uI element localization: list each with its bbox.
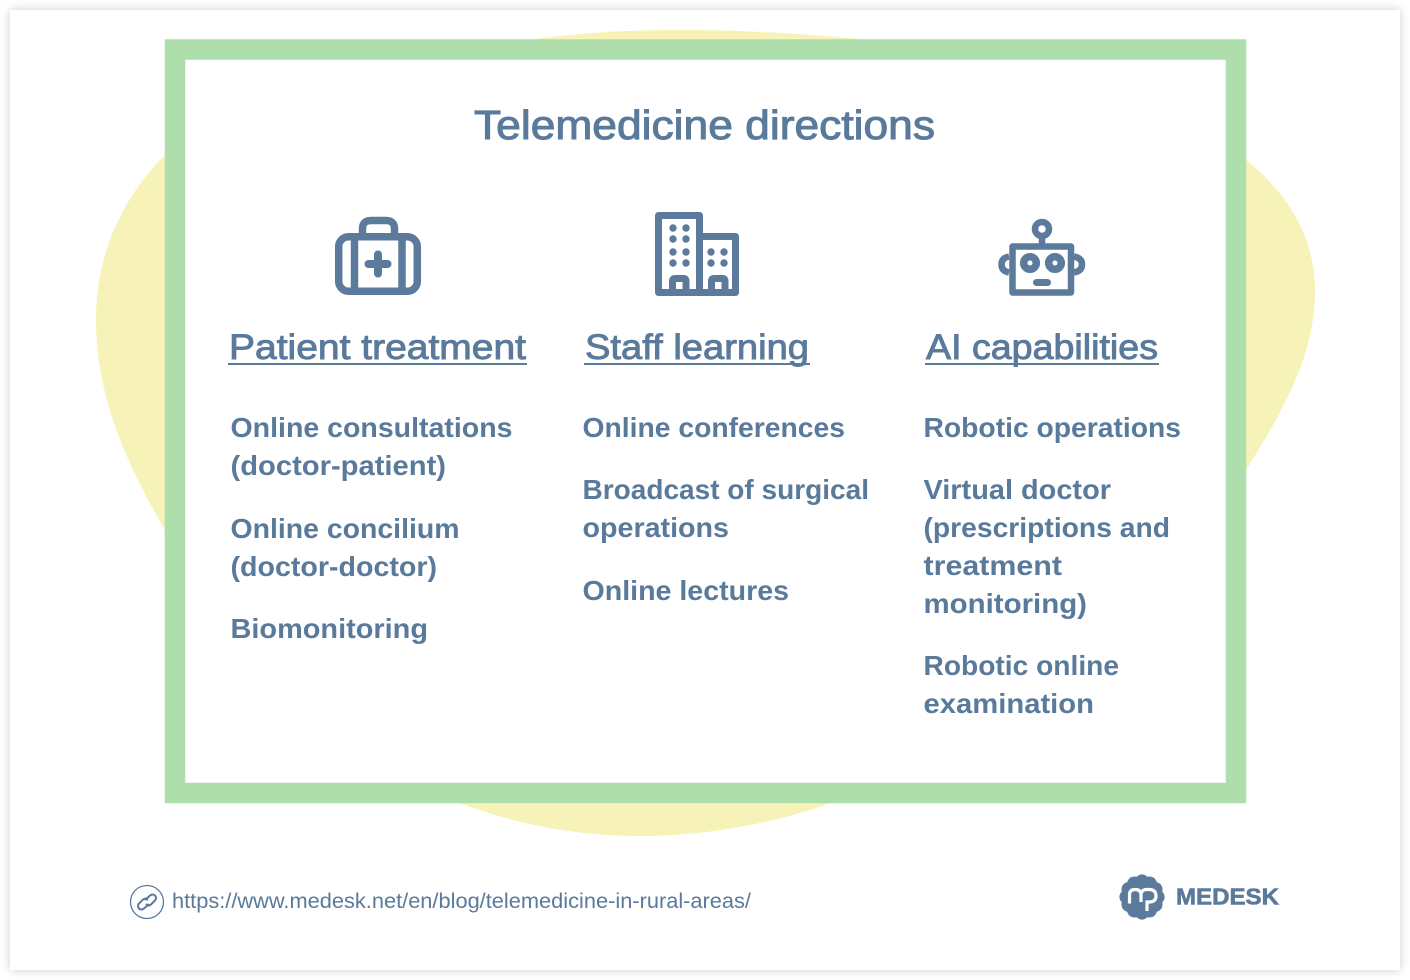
heading: staff learning: Staff learning	[585, 328, 809, 367]
list: AI capabilities: examination	[924, 688, 1094, 719]
list: patient treatment: (doctor-doctor)	[230, 551, 437, 582]
logo: medesk: MEDESK	[1176, 884, 1279, 910]
green framed panel	[175, 50, 1236, 793]
list: AI capabilities	[924, 412, 1181, 719]
icon: robot	[1002, 222, 1082, 292]
logo: medesk	[1119, 874, 1279, 920]
heading: patient treatment: Patient treatment	[229, 328, 526, 367]
list: patient treatment: Biomonitoring	[230, 613, 428, 644]
list: AI capabilities: (prescriptions and	[924, 512, 1170, 543]
list: staff learning	[582, 412, 869, 606]
yellow blob	[96, 30, 1315, 836]
list: AI capabilities: monitoring)	[924, 588, 1087, 619]
heading: AI capabilities: AI capabilities	[926, 328, 1158, 367]
icon: hospital buildings	[658, 216, 736, 292]
list: staff learning: Broadcast of surgical	[582, 474, 869, 505]
list: staff learning: Online conferences	[582, 412, 845, 443]
title: Telemedicine directions	[474, 102, 935, 148]
list: AI capabilities: Virtual doctor	[924, 474, 1111, 505]
source url: https://www.medesk.net/en/blog/telemedicine-in-rural-areas/	[172, 890, 751, 913]
icon: medical bag	[339, 220, 417, 291]
list: AI capabilities: treatment	[924, 550, 1062, 581]
list: AI capabilities: Robotic online	[924, 650, 1119, 681]
list: patient treatment: Online consultations	[230, 412, 512, 443]
list: patient treatment: (doctor-patient)	[230, 450, 446, 481]
icon: link	[130, 886, 164, 918]
list: patient treatment: Online concilium	[230, 513, 460, 544]
list: AI capabilities: Robotic operations	[924, 412, 1181, 443]
list: staff learning: Online lectures	[582, 575, 789, 606]
list: staff learning: operations	[582, 512, 729, 543]
list: patient treatment	[230, 412, 512, 644]
